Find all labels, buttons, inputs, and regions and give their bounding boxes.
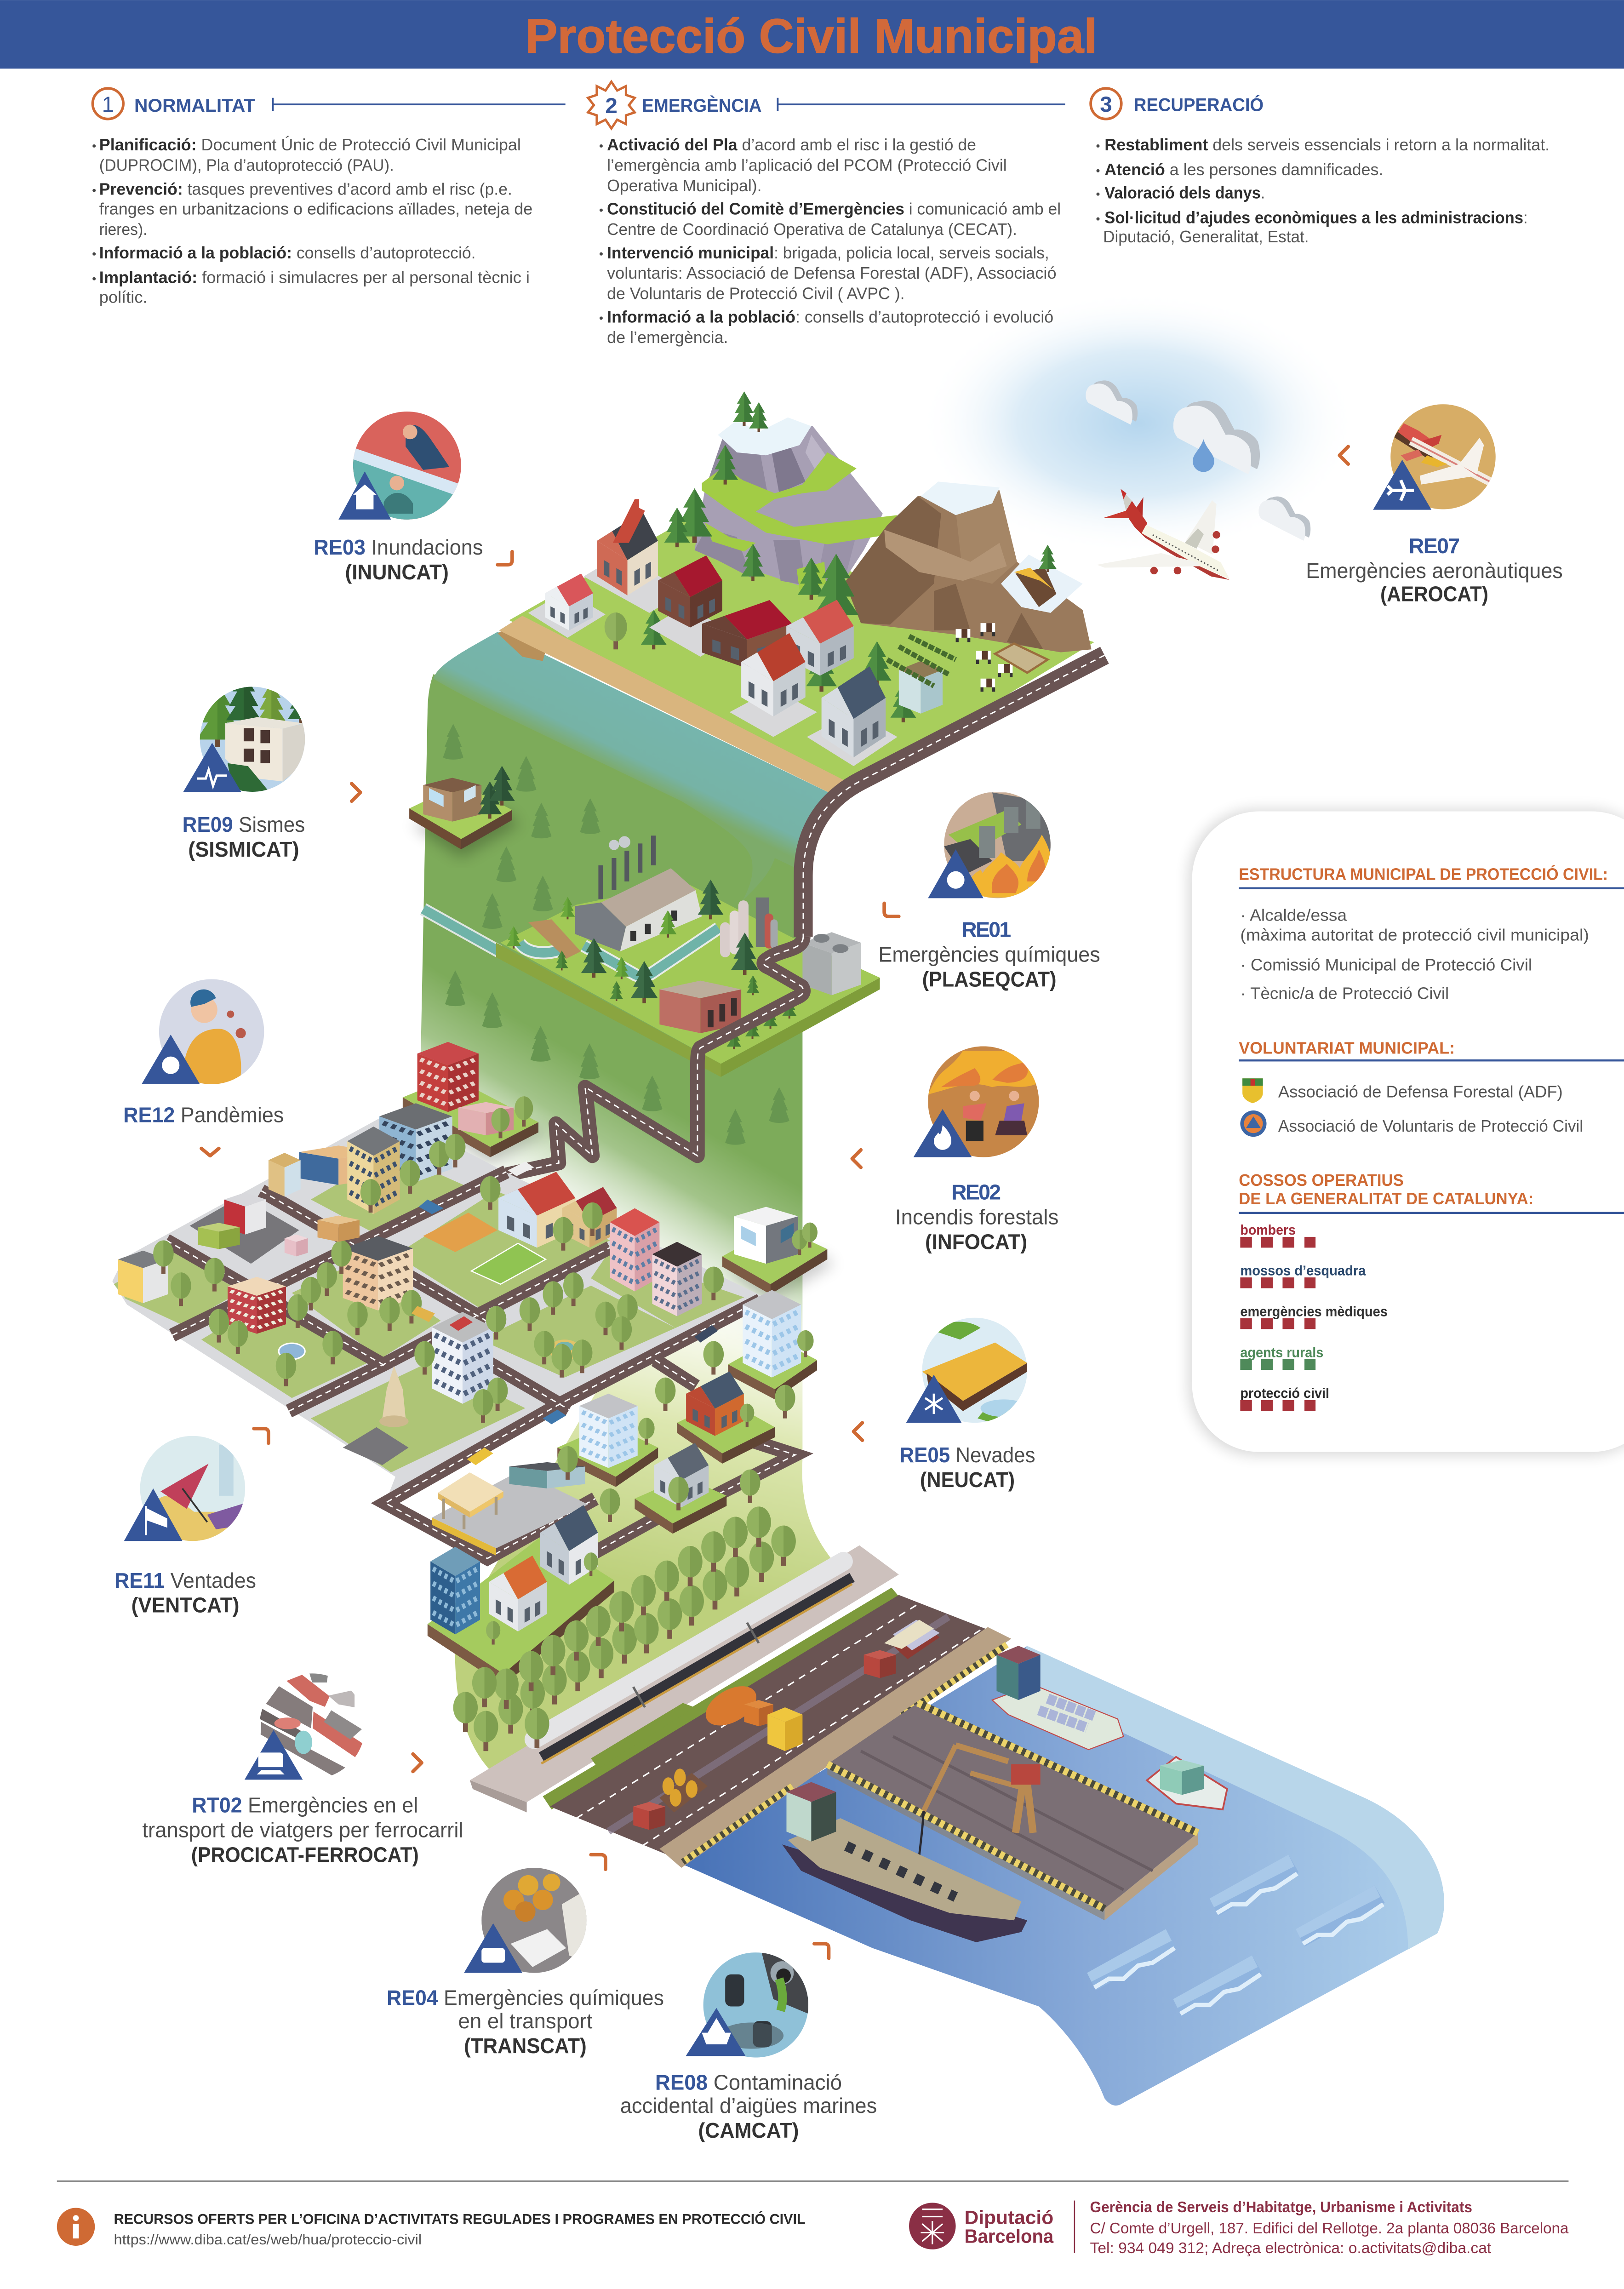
arrow RE09 bbox=[352, 784, 360, 801]
column: emergencia: de Voluntaris de Protecció Civil ( AVPC ). bbox=[607, 284, 905, 303]
label RE01: Emergències químiques bbox=[878, 942, 1100, 966]
icon RE02 bbox=[914, 1046, 1042, 1160]
island shadow: white building bbox=[726, 1252, 835, 1302]
sea bbox=[674, 1646, 1444, 2106]
island: red house bbox=[677, 1371, 775, 1464]
corps: bombers: bombers bbox=[1240, 1222, 1296, 1238]
mountain: grey bbox=[695, 418, 898, 591]
corps: agents rurals: agents rurals bbox=[1240, 1345, 1323, 1360]
column: emergencia: 2 bbox=[605, 94, 618, 118]
footer: diputacio logo bbox=[909, 2203, 1054, 2249]
label RE09: RE09 Sismes bbox=[183, 813, 305, 836]
crane bbox=[918, 1745, 1041, 1868]
arrow RE12 bbox=[201, 1149, 219, 1156]
panel shadow bbox=[1189, 810, 1624, 1455]
icon RE05 bbox=[906, 1318, 1027, 1423]
label RE04: (TRANSCAT) bbox=[464, 2034, 587, 2058]
houses bbox=[528, 499, 943, 766]
smoke bbox=[609, 836, 630, 850]
column: emergencia: Operativa Municipal). bbox=[607, 176, 762, 195]
column: recuperacio: Valoració dels danys. bbox=[1104, 183, 1265, 202]
boat bbox=[497, 628, 546, 661]
waves bbox=[1087, 1854, 1385, 2017]
heading: cossos bbox=[1239, 1171, 1624, 1214]
icon RE04 bbox=[464, 1868, 587, 1973]
icon RE09 bbox=[183, 687, 305, 792]
logo: proteccio civil bbox=[1240, 1110, 1267, 1137]
voluntary AVPC: Associació de Voluntaris de Protecció Civil bbox=[1278, 1116, 1583, 1135]
gas station bbox=[432, 1462, 588, 1556]
heading: cossos: COSSOS OPERATIUS bbox=[1239, 1171, 1404, 1190]
label RE08: accidental d’aigües marines bbox=[620, 2094, 877, 2117]
footer: resources text bbox=[114, 2210, 806, 2248]
factory plateau bbox=[496, 835, 880, 1077]
train bbox=[534, 1562, 852, 1763]
heading: voluntariat: VOLUNTARIAT MUNICIPAL: bbox=[1239, 1038, 1455, 1057]
label RE07 bbox=[1306, 534, 1563, 606]
column: emergencia: Informació a la població: consells d’autoprotecció i evolució bbox=[607, 307, 1053, 326]
island: glass building bbox=[557, 1394, 658, 1487]
label RE08: RE08 Contaminació bbox=[655, 2070, 842, 2094]
label RE05: (NEUCAT) bbox=[920, 1468, 1015, 1492]
header banner bbox=[0, 0, 1624, 69]
ship: cargo bbox=[992, 1646, 1124, 1750]
brick building bbox=[659, 981, 741, 1033]
footer: resources text: RECURSOS OFERTS PER L’OFICINA D’ACTIVITATS REGULADES I PROGRAMES EN PROTECCIÓ CIVIL bbox=[114, 2210, 806, 2227]
footer: address bbox=[1074, 2198, 1569, 2256]
cows and vineyard bbox=[887, 623, 1048, 692]
column: normalitat: 1 bbox=[102, 92, 114, 117]
ribbon: upper green bbox=[420, 674, 838, 1459]
pier bbox=[827, 1703, 1198, 1920]
heading: cossos: DE LA GENERALITAT DE CATALUNYA: bbox=[1239, 1189, 1533, 1208]
city roads bbox=[166, 1172, 795, 1558]
column: normalitat: rieres). bbox=[99, 220, 148, 239]
label RT02: transport de viatgers per ferrocarril bbox=[142, 1818, 463, 1842]
footer rule bbox=[57, 2180, 1568, 2182]
label RE07: (AEROCAT) bbox=[1380, 582, 1488, 606]
corps: emergencies bbox=[1240, 1304, 1388, 1329]
column: emergencia: EMERGÈNCIA bbox=[642, 95, 762, 116]
column: emergencia bbox=[588, 82, 1065, 347]
arrow RE11 bbox=[254, 1429, 269, 1443]
cooling units bbox=[802, 932, 861, 995]
label RT02: RT02 Emergències en el bbox=[192, 1793, 418, 1817]
column: normalitat: Implantació: formació i simulacres per al personal tècnic i bbox=[99, 268, 530, 287]
pines bbox=[605, 391, 916, 722]
label RE04 bbox=[387, 1986, 664, 2058]
corps: emergencies: emergències mèdiques bbox=[1240, 1304, 1388, 1320]
footbridge bbox=[528, 919, 581, 959]
arrow RE02 bbox=[852, 1150, 861, 1167]
arrow RE08 bbox=[814, 1944, 829, 1958]
column: emergencia: Constitució del Comitè d’Emergències i comunicació amb el bbox=[607, 200, 1061, 218]
city buildings bbox=[118, 1103, 702, 1404]
plateau pines bbox=[506, 880, 797, 1049]
corps: bombers bbox=[1240, 1222, 1315, 1248]
panel: structure and corps bbox=[1192, 812, 1624, 1452]
column: normalitat: NORMALITAT bbox=[134, 96, 255, 116]
small island: brown house bbox=[409, 766, 515, 849]
small island shadow bbox=[412, 810, 520, 858]
label RT02: (PROCICAT-FERROCAT) bbox=[191, 1843, 419, 1866]
label RE08 bbox=[620, 2070, 877, 2142]
label RE04: en el transport bbox=[458, 2009, 593, 2033]
label RE03 bbox=[314, 535, 483, 584]
list: estructura: · Tècnic/a de Protecció Civil bbox=[1240, 984, 1449, 1002]
label RE11 bbox=[114, 1568, 256, 1617]
label RE02 bbox=[895, 1180, 1058, 1254]
column: emergencia: l’emergència amb l’aplicació del PCOM (Protecció Civil bbox=[607, 155, 1007, 174]
label RT02 bbox=[142, 1793, 463, 1866]
icon RE11 bbox=[124, 1436, 245, 1541]
label RE09: (SISMICAT) bbox=[188, 837, 299, 861]
list: estructura: · Comissió Municipal de Protecció Civil bbox=[1240, 955, 1532, 974]
column: normalitat: Informació a la població: consells d’autoprotecció. bbox=[99, 243, 476, 262]
city blocks bbox=[114, 1153, 744, 1472]
icon RE07 bbox=[1373, 404, 1497, 510]
label RE05 bbox=[899, 1443, 1035, 1492]
label RE11: RE11 Ventades bbox=[114, 1568, 256, 1592]
city road dashes bbox=[166, 1172, 795, 1558]
label RE07: Emergències aeronàutiques bbox=[1306, 559, 1563, 583]
corps: mossos: mossos d’esquadra bbox=[1240, 1263, 1366, 1279]
airplane bbox=[1097, 489, 1229, 580]
footer: address: Gerència de Serveis d’Habitatge, Urbanisme i Activitats bbox=[1090, 2198, 1472, 2215]
corps: proteccio civil bbox=[1240, 1385, 1329, 1411]
column: recuperacio: RECUPERACIÓ bbox=[1134, 94, 1264, 115]
label RE01: (PLASEQCAT) bbox=[922, 967, 1057, 991]
city vehicles bbox=[198, 1162, 718, 1465]
label RE01: RE01 bbox=[961, 917, 1011, 941]
chimneys bbox=[600, 835, 653, 899]
island: glass tower bbox=[728, 1290, 817, 1399]
island shadow: red building bbox=[409, 1109, 549, 1164]
icon RE03 bbox=[338, 412, 461, 520]
column: recuperacio: Restabliment dels serveis essencials i retorn a la normalitat. bbox=[1104, 135, 1550, 154]
arrow RE07 bbox=[1339, 446, 1348, 464]
column: normalitat: (DUPROCIM), Pla d’autoprotecció (PAU). bbox=[99, 155, 394, 174]
column: recuperacio: Atenció a les persones damnificades. bbox=[1104, 160, 1383, 179]
column: recuperacio: 3 bbox=[1100, 92, 1112, 117]
list: estructura: · Alcalde/essa bbox=[1240, 906, 1347, 925]
highway bbox=[550, 1595, 1011, 1868]
label RE02: Incendis forestals bbox=[895, 1205, 1058, 1229]
title: Protecció Civil Municipal bbox=[525, 9, 1097, 63]
island: red building bbox=[403, 1042, 538, 1157]
corps: agents rurals bbox=[1240, 1345, 1323, 1370]
icon RE01 bbox=[928, 792, 1052, 900]
label RE01 bbox=[878, 917, 1100, 991]
statue bbox=[379, 1366, 409, 1427]
ship: tanker bbox=[782, 1782, 1027, 1942]
column: normalitat: Prevenció: tasques preventives d’acord amb el risc (p.e. bbox=[99, 180, 512, 199]
arrow RT02 bbox=[413, 1754, 422, 1772]
ribbon: lower lawn bbox=[455, 1284, 864, 1783]
column: emergencia: Activació del Pla d’acord amb el risc i la gestió de bbox=[607, 135, 976, 154]
ribbon pines bbox=[443, 724, 789, 1145]
column: emergencia: de l’emergència. bbox=[607, 328, 728, 347]
top land: hillside village bbox=[499, 391, 1104, 937]
road: zigzag descent bbox=[506, 937, 803, 1175]
footer: address: Tel: 934 049 312; Adreça electrònica: o.activitats@diba.cat bbox=[1090, 2239, 1491, 2256]
footer: diputacio logo: Diputació bbox=[965, 2207, 1053, 2228]
column: emergencia: Centre de Coordinació Operativa de Catalunya (CECAT). bbox=[607, 220, 1017, 239]
label RE07: RE07 bbox=[1409, 534, 1460, 558]
list: estructura: (màxima autoritat de protecció civil municipal) bbox=[1240, 925, 1589, 944]
highway trucks bbox=[633, 1620, 940, 1830]
city trees bbox=[153, 1134, 795, 1522]
road: top descending bbox=[803, 655, 1104, 937]
label RE05: RE05 Nevades bbox=[899, 1443, 1035, 1467]
label RE02: RE02 bbox=[951, 1180, 1001, 1204]
island: grey house bbox=[635, 1443, 726, 1534]
column: recuperacio bbox=[1091, 88, 1550, 246]
label RE02: (INFOCAT) bbox=[925, 1230, 1027, 1254]
label RE12: RE12 Pandèmies bbox=[123, 1103, 284, 1127]
arrow RE05 bbox=[853, 1423, 862, 1440]
label RE08: (CAMCAT) bbox=[698, 2118, 799, 2142]
column: recuperacio: Diputació, Generalitat, Estat. bbox=[1103, 227, 1309, 246]
stream left of plateau bbox=[423, 909, 499, 951]
canal bbox=[520, 928, 719, 976]
sky glow bbox=[919, 292, 1357, 555]
label RE03: RE03 Inundacions bbox=[314, 535, 483, 559]
factory bbox=[575, 868, 702, 951]
arrow RE01 bbox=[884, 903, 899, 916]
icon RT02 bbox=[245, 1664, 368, 1782]
label RE11: (VENTCAT) bbox=[132, 1593, 239, 1617]
corps: mossos bbox=[1240, 1263, 1366, 1288]
railway and grass strip bbox=[470, 1545, 899, 1812]
label RE03: (INUNCAT) bbox=[345, 560, 449, 584]
logo: ADF bbox=[1242, 1078, 1263, 1103]
voluntary ADF: Associació de Defensa Forestal (ADF) bbox=[1278, 1082, 1563, 1101]
column: normalitat: franges en urbanitzacions o edificacions aïllades, neteja de bbox=[99, 200, 532, 218]
footer: resources text: https://www.diba.cat/es/web/hua/proteccio-civil bbox=[114, 2231, 422, 2248]
city plate bbox=[112, 1112, 765, 1503]
footer: diputacio logo: Barcelona bbox=[965, 2226, 1054, 2247]
silos bbox=[720, 898, 778, 957]
arrow RE04 bbox=[591, 1854, 606, 1869]
heading: estructura: ESTRUCTURA MUNICIPAL DE PROTECCIÓ CIVIL: bbox=[1239, 864, 1608, 884]
island: white building bbox=[722, 1207, 827, 1294]
footer: address: C/ Comte d’Urgell, 187. Edifici del Rellotge. 2a planta 08036 Barcelona bbox=[1090, 2220, 1569, 2237]
ship: tug bbox=[1147, 1757, 1227, 1809]
stream water bbox=[423, 909, 499, 951]
column: recuperacio: Sol·licitud d’ajudes econòmiques a les administracions: bbox=[1104, 208, 1528, 227]
icon RE12 bbox=[142, 979, 264, 1084]
river bbox=[434, 632, 838, 900]
icon RE08 bbox=[686, 1952, 808, 2058]
label RE09 bbox=[183, 813, 305, 861]
orchard trees bbox=[453, 1506, 796, 1751]
column: normalitat: polític. bbox=[99, 288, 148, 307]
clouds and droplet bbox=[1086, 380, 1310, 541]
column: emergencia: Intervenció municipal: brigada, policia local, serveis socials, bbox=[607, 243, 1049, 262]
corps: proteccio civil: protecció civil bbox=[1240, 1385, 1329, 1401]
column: normalitat bbox=[92, 88, 566, 307]
label RE04: RE04 Emergències químiques bbox=[387, 1986, 664, 2009]
mountain: brown bbox=[845, 481, 1092, 652]
footer: info icon bbox=[57, 2208, 95, 2246]
cabin on snow bbox=[1001, 545, 1083, 613]
arrow RE03 bbox=[497, 552, 512, 565]
column: normalitat: Planificació: Document Únic de Protecció Civil Municipal bbox=[99, 135, 521, 154]
island: lower houses and tower bbox=[428, 1505, 614, 1685]
list: estructura bbox=[1240, 906, 1589, 1002]
heading: voluntariat bbox=[1239, 1038, 1624, 1061]
column: emergencia: voluntaris: Associació de Defensa Forestal (ADF), Associació bbox=[607, 263, 1057, 282]
